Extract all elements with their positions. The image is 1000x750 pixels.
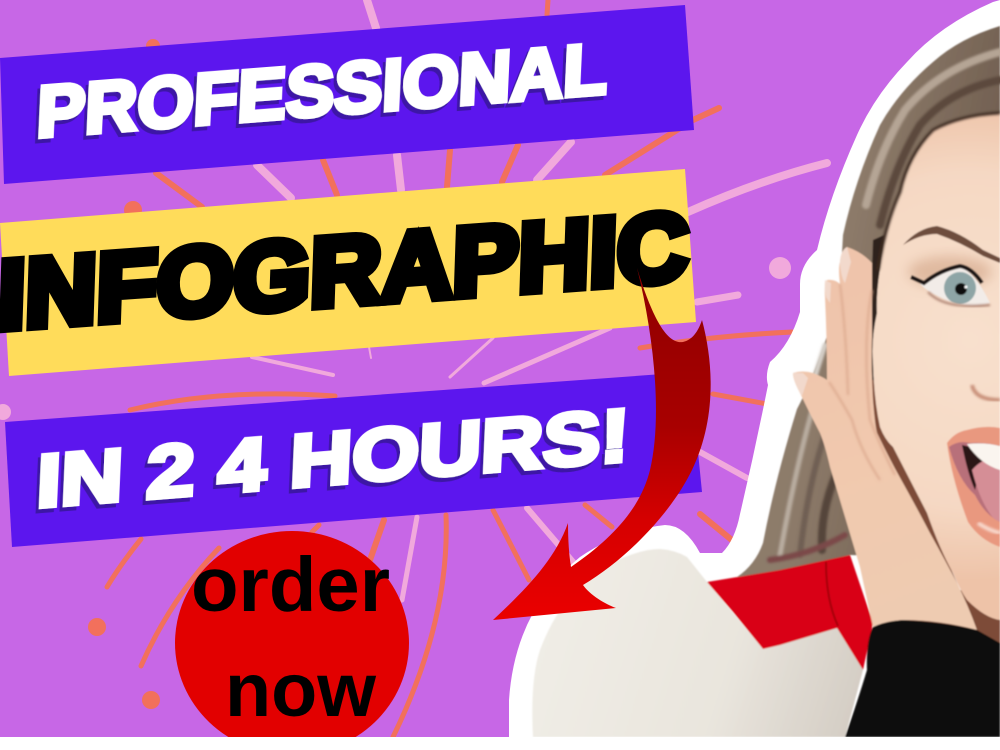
red collar [707,555,873,670]
burst: orange rays [107,0,792,737]
nose [972,385,1000,400]
heading: IN 2 4 HOURS!: IN 2 4 HOURS! [35,393,631,523]
dark hair behind ear [871,235,884,380]
collar fold line [826,562,838,626]
burst: dots [0,39,791,709]
eyebrow [903,226,1000,263]
eye [911,266,990,306]
red arrow [493,268,711,620]
hair streaks [770,52,1000,560]
banner: infographic [0,169,696,376]
face [872,113,1000,620]
white sticker outline [509,0,1000,737]
mouth [945,427,1000,547]
banner: professional [0,5,694,184]
call to action: order now [175,531,409,750]
eye shadow tint [908,256,992,288]
dark hairline [878,113,1000,270]
sweater [532,549,863,737]
heading: INFOGRAPHIC: INFOGRAPHIC [0,191,690,350]
hand [793,247,977,630]
burst: pink rays [252,0,827,600]
neck and jaw shadow [872,360,1000,650]
photo: woman cutout [509,0,1000,737]
banner: in 24 hours [5,372,702,547]
hand crease shadow [829,284,895,480]
label: order: order [191,542,390,628]
lips [947,427,1000,547]
finger nails [793,247,851,396]
lip highlight [978,523,1000,533]
heading: PROFESSIONAL: PROFESSIONAL [35,29,609,153]
hair [737,26,1000,577]
mouth interior [948,442,1000,522]
label: now: now [225,648,377,733]
black sleeve [845,620,1000,737]
